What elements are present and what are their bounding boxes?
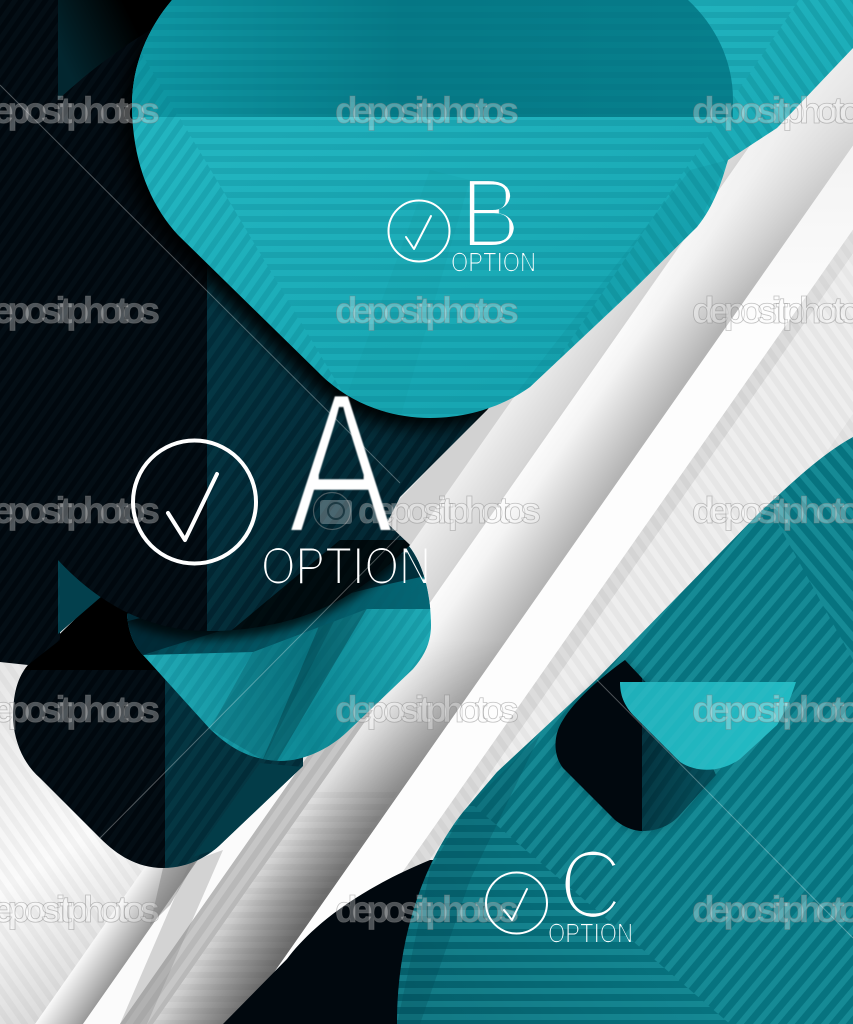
label: OPTION C: OPTION [548, 918, 633, 948]
heading: letter C: C [559, 830, 623, 939]
shape: light teal tab over small diamond [620, 682, 796, 770]
watermark grid: depositphotos [358, 490, 541, 531]
watermark grid: depositphotos [335, 290, 519, 331]
label: OPTION B: OPTION [451, 246, 536, 278]
panel: top teal shape B [132, 0, 853, 418]
icon: watermark camera [314, 492, 352, 530]
panel: lower right teal shape C [380, 430, 853, 1024]
icon: check circle A [133, 440, 256, 564]
panel: left black column [0, 0, 102, 665]
panel: large dark rounded shape A [58, 0, 489, 644]
icon: check circle B [388, 200, 450, 262]
shadow below top teal shape [121, 25, 489, 436]
panel: middle teal rounded shape [127, 546, 431, 761]
watermark grid: depositphotos [335, 689, 519, 730]
panel: lower dark rounded diamond [13, 597, 303, 868]
heading: letter B: B [460, 159, 521, 268]
label: OPTION A: OPTION [261, 537, 431, 596]
shape: black bottom wedge [223, 860, 445, 1024]
icon: small dark rounded diamond [553, 660, 716, 834]
watermark grid: depositphotos [335, 90, 519, 131]
heading: letter A: A [288, 352, 395, 575]
icon: check circle C [486, 872, 547, 934]
shape: dark teal corner triangle [58, 0, 172, 100]
watermark grid: depositphotos [335, 889, 519, 930]
